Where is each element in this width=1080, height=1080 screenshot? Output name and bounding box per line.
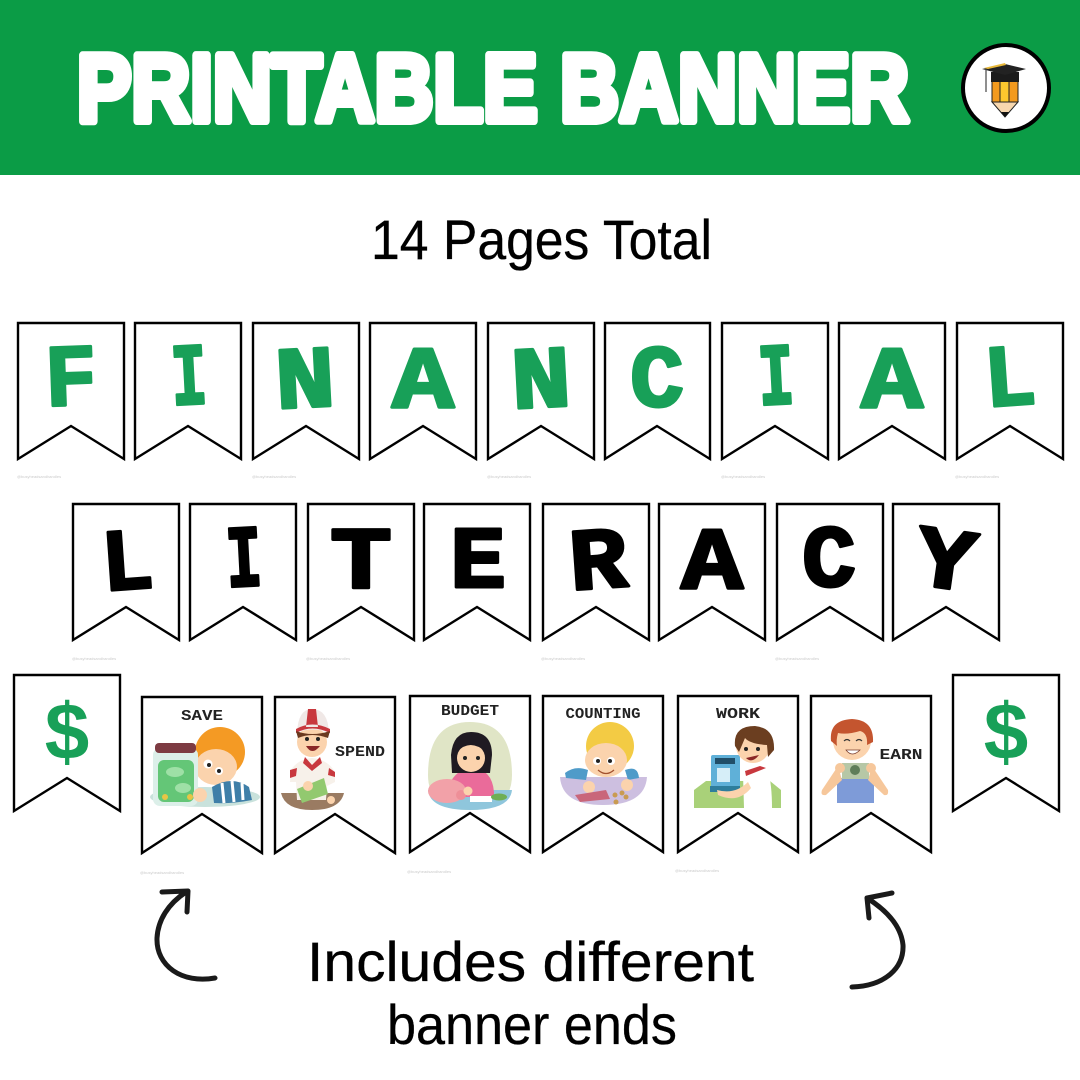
- banner: spend: [275, 697, 395, 853]
- watermarks row one: [17, 474, 999, 479]
- watermarks row one: @busyheadsandhandles: [955, 474, 999, 479]
- banner row: FINANCIAL: A: [392, 335, 454, 434]
- watermarks row one: @busyheadsandhandles: [487, 474, 531, 479]
- banner row: FINANCIAL: N: [509, 333, 574, 435]
- banner: budget: [410, 696, 530, 852]
- banner row: LITERACY: R: [566, 514, 631, 617]
- banner: counting: COUNTING: [566, 706, 640, 723]
- banner row: FINANCIAL: F: [43, 332, 99, 433]
- banner: budget: BUDGET: [441, 703, 499, 720]
- arrow: left: [157, 891, 215, 979]
- watermarks row one: @busyheadsandhandles: [721, 474, 765, 479]
- banner end: left dollar: [14, 675, 120, 811]
- banner: save: SAVE: [181, 708, 223, 725]
- banner: earn: EARN: [880, 747, 922, 764]
- title: PRINTABLE BANNER: [77, 35, 909, 142]
- watermarks row two: @busyheadsandhandles: [541, 656, 585, 661]
- banner row: LITERACY: Y: [909, 512, 982, 619]
- banner row: FINANCIAL: C: [630, 334, 684, 433]
- watermarks row three: @busyheadsandhandles: [675, 868, 719, 873]
- icon: graduation cap pencil logo: [963, 45, 1049, 131]
- banner row: FINANCIAL: N: [273, 333, 338, 435]
- banner: save: [142, 697, 262, 853]
- caption line two: banner ends: [387, 993, 677, 1056]
- banner row: FINANCIAL: A: [861, 335, 923, 434]
- banner end: left dollar: $: [45, 687, 89, 776]
- banner: counting: [543, 696, 663, 852]
- watermarks row two: @busyheadsandhandles: [775, 656, 819, 661]
- banner end: right dollar: $: [984, 687, 1028, 776]
- watermarks row three: [140, 868, 719, 875]
- banner row: FINANCIAL: L: [981, 331, 1040, 434]
- watermarks row three: @busyheadsandhandles: [140, 870, 184, 875]
- banner row: LITERACY: C: [802, 514, 856, 613]
- banner: work: WORK: [716, 706, 760, 723]
- subtitle: 14 Pages Total: [371, 208, 712, 271]
- header band: [0, 0, 1080, 175]
- banner row: LITERACY: [73, 504, 999, 640]
- watermarks row two: @busyheadsandhandles: [306, 656, 350, 661]
- arrow: right: [852, 893, 903, 987]
- watermarks row three: @busyheadsandhandles: [407, 869, 451, 874]
- banner row: LITERACY: T: [330, 516, 392, 615]
- banner row: LITERACY: L: [98, 515, 157, 618]
- banner: spend: SPEND: [335, 744, 385, 761]
- banner end: right dollar: [953, 675, 1059, 811]
- banner row: LITERACY: I: [224, 513, 265, 614]
- watermarks row two: @busyheadsandhandles: [72, 656, 116, 661]
- banner row: FINANCIAL: [18, 323, 1063, 459]
- banner row: FINANCIAL: I: [169, 331, 210, 432]
- banner row: FINANCIAL: I: [756, 331, 797, 432]
- banner row: LITERACY: E: [450, 515, 506, 614]
- caption line one: Includes different: [307, 930, 754, 993]
- watermarks row one: @busyheadsandhandles: [17, 474, 61, 479]
- watermarks row two: [72, 656, 819, 661]
- banner: work: [678, 696, 798, 852]
- banner row: LITERACY: A: [681, 516, 743, 615]
- watermarks row one: @busyheadsandhandles: [252, 474, 296, 479]
- banner: earn: [811, 696, 931, 852]
